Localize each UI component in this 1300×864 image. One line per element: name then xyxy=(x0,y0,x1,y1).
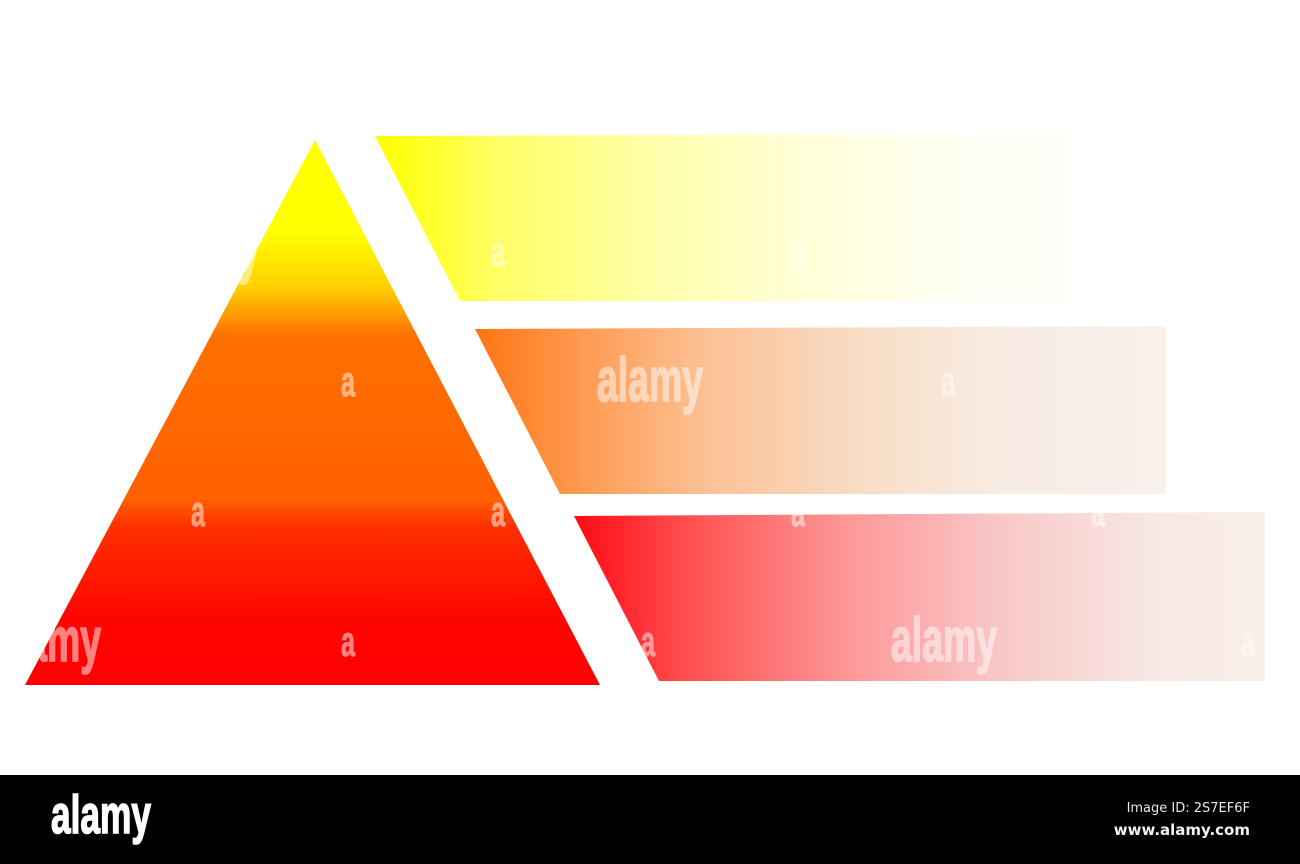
pyramid triangle xyxy=(25,140,600,685)
watermarks over the shapes: alamy xyxy=(153,216,259,285)
image id: Image ID: 2S7EF6F xyxy=(1127,801,1250,816)
watermarks over the shapes: a xyxy=(191,488,206,536)
banner: bottom red xyxy=(574,512,1265,681)
banner: middle orange xyxy=(475,326,1166,494)
watermarks over the shapes: a xyxy=(641,618,656,666)
watermarks over the shapes: alamy xyxy=(597,346,703,415)
footer logo: alamy xyxy=(51,785,151,845)
watermarks over the shapes: alamy xyxy=(891,606,997,675)
watermarks over the shapes: a xyxy=(491,488,506,536)
website: www.alamy.com xyxy=(1114,821,1250,839)
watermarks over the shapes: a xyxy=(791,228,806,276)
watermarks over the shapes: alamy xyxy=(0,606,101,675)
watermarks over the shapes: a xyxy=(341,618,356,666)
watermarks over the shapes: a xyxy=(1241,618,1256,666)
banner: top yellow xyxy=(375,134,1065,301)
watermarks over the shapes: a xyxy=(1091,488,1106,536)
watermarks over the shapes: a xyxy=(491,228,506,276)
watermarks over the shapes: a xyxy=(341,358,356,406)
watermarks over the shapes xyxy=(0,216,1256,675)
footer bar xyxy=(0,775,1300,864)
watermarks over the shapes: a xyxy=(791,488,806,536)
watermarks over the shapes: a xyxy=(941,358,956,406)
